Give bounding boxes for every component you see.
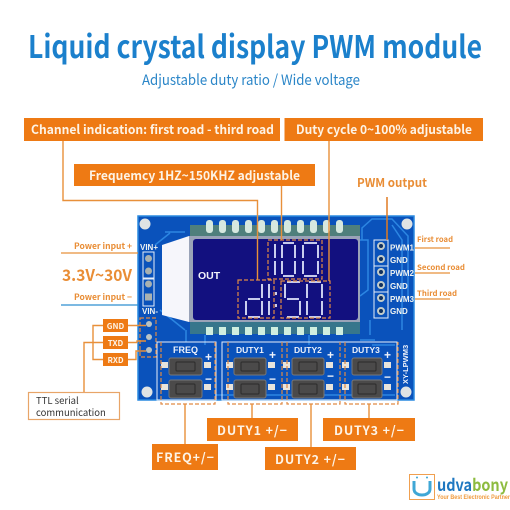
- TXD tag: TXD: [108, 338, 124, 349]
- top header pins: [190, 220, 360, 236]
- FREQ callout: FREQ+/−: [156, 447, 214, 466]
- push buttons: +: [269, 348, 276, 362]
- DUTY2 callout: DUTY2 +/−: [275, 449, 345, 468]
- arrow: channel leader: [63, 141, 258, 280]
- power input minus label: Power input −: [74, 291, 132, 303]
- arrow: duty cycle leader: [328, 141, 330, 281]
- mounting holes: [140, 218, 412, 398]
- circuit board: DUTY2: [294, 345, 322, 355]
- DUTY1 callout: DUTY1 +/−: [217, 420, 287, 439]
- FREQ callout: [152, 444, 218, 470]
- PWM output label: PWM output: [357, 174, 427, 191]
- first road label: First road: [417, 234, 453, 245]
- DUTY2 callout: [265, 447, 356, 470]
- circuit board: DUTY3: [352, 345, 380, 355]
- PWM output pins: GND: [390, 307, 408, 316]
- GND tag: [103, 319, 128, 332]
- push buttons: +: [327, 348, 334, 362]
- arrow: frequency leader: [280, 186, 282, 240]
- icon: logo magnet mark: [410, 474, 434, 500]
- arrow: button leaders: [185, 404, 369, 447]
- dashed highlight: duty value: [268, 240, 322, 279]
- push buttons: −: [269, 372, 276, 386]
- TTL serial communication box: communication: [36, 405, 106, 419]
- circuit board: DUTY1: [236, 345, 264, 355]
- push buttons: +: [384, 348, 391, 362]
- push buttons: [161, 348, 391, 398]
- frequency callout: Frequemcy 1HZ~150KHZ adjustable: [89, 165, 300, 184]
- DUTY1 callout: [207, 418, 298, 441]
- LCD backlight tab: [162, 236, 189, 322]
- RXD tag: [103, 353, 128, 366]
- TTL serial communication box: TTL serial: [36, 393, 79, 407]
- TXD tag: [103, 336, 128, 349]
- power input minus line: [61, 304, 138, 306]
- left power pins: VIN+: [140, 243, 158, 252]
- dashed highlight: DUTY2 buttons: [287, 342, 340, 404]
- voltage range: 3.3V~30V: [62, 262, 132, 286]
- dashed highlight: FREQ buttons: [161, 342, 215, 404]
- duty cycle callout: Duty cycle 0~100% adjustable: [296, 119, 472, 138]
- dashed highlight: DUTY3 buttons: [345, 342, 398, 404]
- LCD display: [189, 236, 360, 322]
- power input plus label: Power input +: [74, 240, 132, 252]
- dashed highlight: DUTY1 buttons: [228, 342, 282, 404]
- power input plus line: [61, 252, 138, 254]
- dashed highlight: frequency value: [281, 281, 330, 318]
- dashed highlight: channel value: [238, 280, 274, 318]
- circuit board: XY-LPWM3: [401, 345, 410, 384]
- channel value d1: [246, 284, 276, 317]
- DUTY3 callout: [323, 418, 415, 441]
- PWM output pins: GND: [390, 256, 408, 265]
- OUT label: OUT: [198, 270, 221, 282]
- subtitle: Adjustable duty ratio / Wide voltage: [142, 69, 360, 90]
- left power pins: [140, 243, 158, 316]
- duty value 100: [275, 243, 318, 276]
- push buttons: −: [327, 369, 334, 383]
- RXD tag: RXD: [107, 355, 124, 366]
- bottom header pins: [190, 322, 360, 335]
- serial pads: [140, 318, 156, 357]
- frequency value 50: [285, 282, 322, 317]
- GND tag: GND: [107, 321, 125, 332]
- third road label: Third road: [417, 288, 457, 299]
- push buttons: −: [205, 372, 212, 386]
- TTL serial communication box: [28, 392, 120, 420]
- silk labels: FREQ: [173, 345, 198, 355]
- arrow: PWM output leader: [386, 197, 388, 240]
- serial connector lines: [84, 326, 146, 392]
- PWM output pins: PWM1: [390, 244, 415, 252]
- second road label: Second road: [417, 262, 465, 273]
- button frames: [157, 342, 216, 400]
- push buttons: −: [384, 370, 391, 384]
- PWM output pins: PWM2: [390, 269, 415, 278]
- PWM output pins: GND: [390, 282, 408, 291]
- logo: [410, 471, 510, 501]
- circuit board: [138, 216, 415, 400]
- PWM output pins: [374, 240, 415, 318]
- channel indication callout: Channel indication: first road - third road: [31, 119, 274, 138]
- DUTY3 callout: DUTY3 +/−: [334, 420, 404, 439]
- PWM output pins: PWM3: [390, 295, 415, 304]
- push buttons: +: [205, 350, 212, 364]
- left power pins: VIN-: [142, 307, 158, 316]
